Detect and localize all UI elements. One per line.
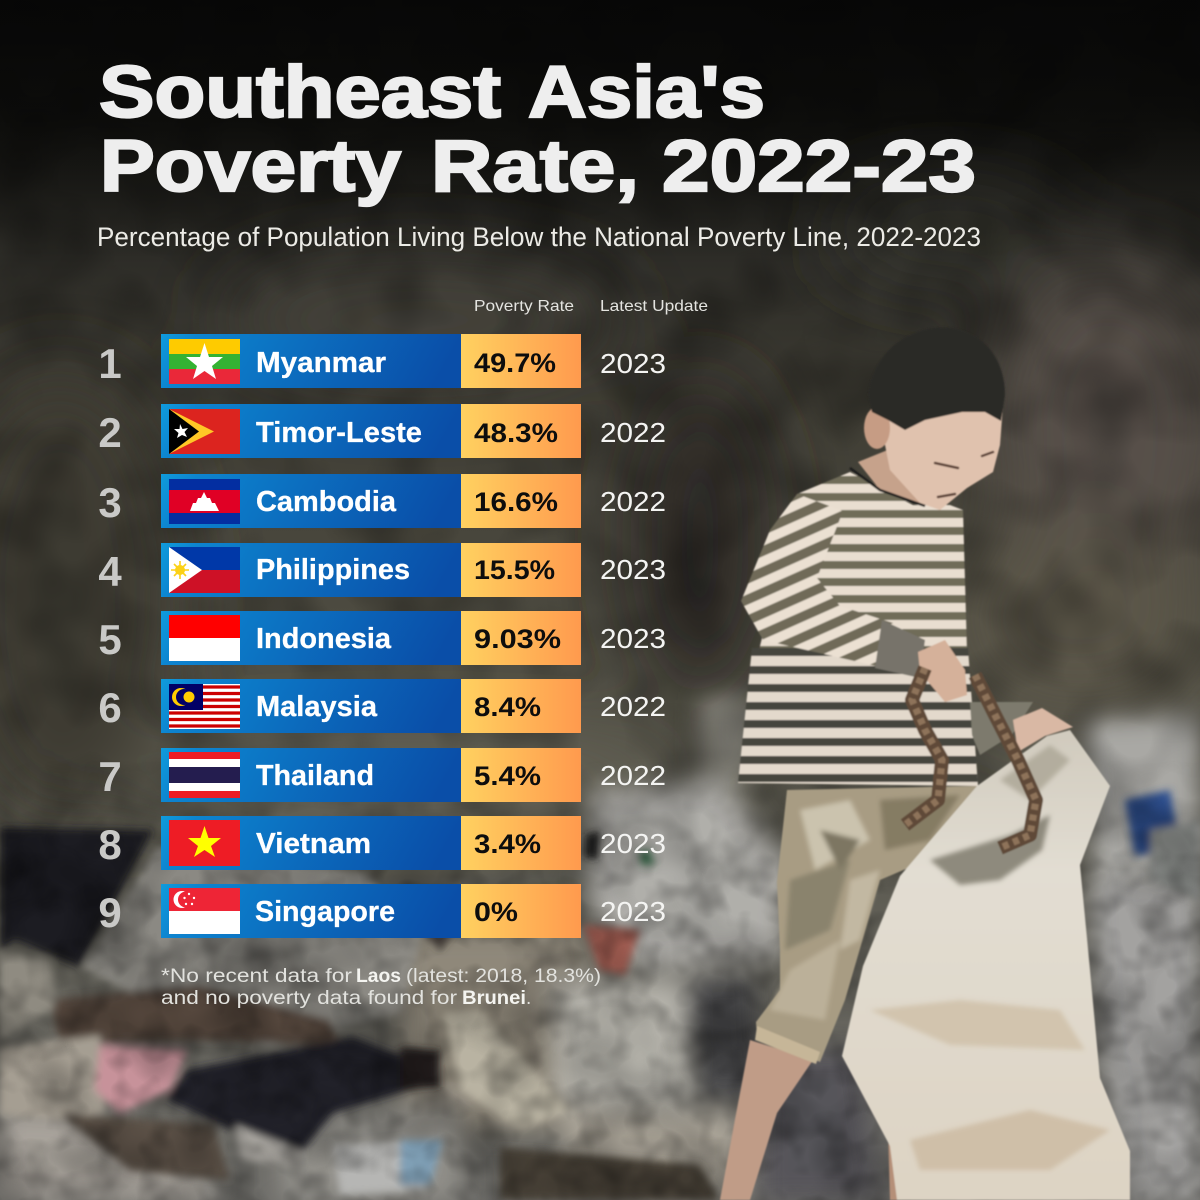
column header: poverty rate: Poverty Rate [474, 298, 574, 315]
row 4: Philippines: 4 [98, 548, 122, 595]
footnote: . [526, 988, 531, 1009]
row 9: Singapore: 0% [474, 897, 518, 927]
hair [868, 327, 1005, 430]
column header: latest update: Latest Update [600, 298, 708, 315]
foreground rubbish shapes [0, 790, 1200, 1200]
shorts [755, 786, 978, 1064]
far sleeve [970, 702, 1033, 755]
far leg [888, 1130, 916, 1200]
row 1: Myanmar [98, 334, 666, 388]
row 6: Malaysia [98, 679, 666, 733]
subtitle: Percentage of Population Living Below the National Poverty Line, 2022-2023 [97, 222, 981, 252]
photo: boy carrying a sack [720, 327, 1130, 1200]
row 3: Cambodia [98, 474, 666, 528]
row 9: Singapore: 2023 [600, 896, 666, 927]
row 5: Indonesia [98, 611, 666, 665]
eye and mouth [935, 452, 993, 497]
shirt body [738, 472, 978, 786]
far hand [1013, 708, 1073, 752]
flag: Timor-Leste [169, 409, 240, 454]
footnote: and no poverty data found for [161, 988, 458, 1009]
footnote: Laos [356, 966, 401, 987]
shirt sleeve [741, 494, 920, 676]
footnote: Brunei [462, 988, 526, 1009]
row 7: Thailand: 7 [98, 753, 122, 800]
row 4: Philippines: 2023 [600, 554, 666, 585]
flag: Malaysia [169, 684, 240, 729]
row 2: Timor-Leste: 48.3% [474, 418, 558, 448]
row 7: Thailand [98, 748, 666, 802]
title: Rate, [431, 126, 639, 207]
row 2: Timor-Leste [98, 404, 666, 458]
row 3: Cambodia: Cambodia [256, 486, 397, 518]
row 8: Vietnam: 3.4% [474, 829, 541, 859]
flag: Philippines [169, 547, 240, 593]
footnote: *No recent data for [161, 966, 353, 987]
row 1: Myanmar: 49.7% [474, 348, 556, 378]
flag: Myanmar [169, 339, 240, 384]
footnote [161, 966, 601, 1009]
row 5: Indonesia: 9.03% [474, 624, 561, 654]
row 8: Vietnam: Vietnam [256, 828, 371, 860]
row 9: Singapore: 9 [98, 889, 122, 936]
row 2: Timor-Leste: Timor-Leste [256, 417, 422, 449]
title: Asia's [528, 52, 765, 133]
necklace [850, 468, 925, 506]
row 6: Malaysia: Malaysia [256, 691, 378, 723]
footnote: (latest: 2018, 18.3%) [406, 966, 601, 987]
ear [864, 407, 890, 449]
near leg [720, 1040, 813, 1200]
face [880, 405, 1003, 510]
rusty chain [905, 668, 1036, 848]
row 4: Philippines [98, 543, 666, 597]
row 6: Malaysia: 8.4% [474, 692, 541, 722]
neck [858, 445, 925, 505]
row 4: Philippines: 15.5% [474, 555, 555, 585]
row 5: Indonesia: 5 [98, 616, 122, 663]
row 1: Myanmar: Myanmar [256, 347, 386, 379]
flag: Thailand [169, 752, 240, 798]
row 9: Singapore: Singapore [255, 896, 395, 928]
near hand [918, 640, 967, 702]
cuff [875, 620, 925, 678]
row 9: Singapore [98, 884, 666, 938]
title [99, 52, 976, 207]
flag: Cambodia [169, 479, 240, 524]
row 6: Malaysia: 2022 [600, 691, 666, 722]
title: Poverty [100, 126, 401, 207]
title: 2022-23 [662, 126, 976, 207]
row 2: Timor-Leste: 2 [98, 409, 122, 456]
row 1: Myanmar: 1 [98, 340, 122, 387]
flag: Singapore [169, 888, 240, 934]
mid-ground rubbish shapes [0, 695, 1200, 1200]
row 8: Vietnam [98, 816, 666, 870]
row 7: Thailand: 2022 [600, 760, 666, 791]
row 8: Vietnam: 2023 [600, 828, 666, 859]
row 7: Thailand: 5.4% [474, 761, 541, 791]
flag: Vietnam [169, 820, 240, 866]
row 5: Indonesia: Indonesia [256, 623, 392, 655]
title: Southeast [99, 52, 501, 133]
flag: Indonesia [169, 615, 240, 661]
row 6: Malaysia: 6 [98, 684, 122, 731]
row 1: Myanmar: 2023 [600, 348, 666, 379]
row 7: Thailand: Thailand [256, 760, 374, 792]
row 2: Timor-Leste: 2022 [600, 417, 666, 448]
row 3: Cambodia: 3 [98, 479, 122, 526]
row 4: Philippines: Philippines [256, 554, 410, 586]
row 3: Cambodia: 16.6% [474, 487, 558, 517]
sack [842, 730, 1130, 1200]
row 8: Vietnam: 8 [98, 821, 122, 868]
row 5: Indonesia: 2023 [600, 623, 666, 654]
row 3: Cambodia: 2022 [600, 486, 666, 517]
